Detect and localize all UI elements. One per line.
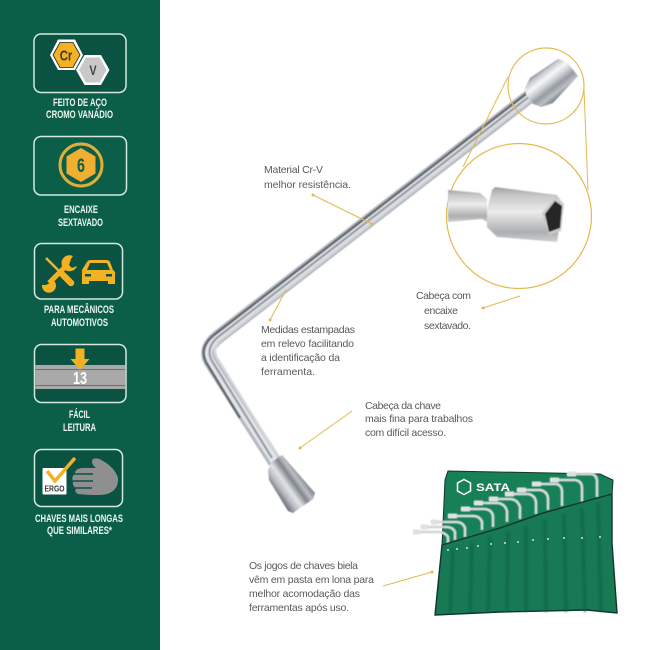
label: fácil leitura <box>63 408 96 434</box>
label: chaves mais longas: QUE SIMILARES* <box>47 525 113 537</box>
text: jogos: ferramentas após uso. <box>249 602 349 614</box>
arrow: cabeça com encaixe <box>482 296 520 310</box>
icon: Cr hexagon: Cr <box>60 47 72 64</box>
arrow: jogos <box>383 570 434 586</box>
icon: wrench and screwdriver <box>42 255 77 293</box>
wrench heads <box>413 474 576 532</box>
panel: chrome vanadium <box>34 34 126 92</box>
text: jogos <box>249 560 374 614</box>
panel: mechanics <box>34 244 122 299</box>
icon: hand <box>72 458 118 495</box>
roll flap <box>442 471 613 546</box>
text: material <box>264 164 351 191</box>
big zoom circle with socket detail <box>446 144 592 288</box>
icon: car <box>82 260 115 284</box>
label: feito de aço: FEITO DE AÇO <box>53 97 107 109</box>
label: para mecânicos: AUTOMOTIVOS <box>51 317 108 329</box>
label: encaixe sextavado: SEXTAVADO <box>58 217 103 229</box>
zoom lines <box>463 77 588 190</box>
wrench set <box>413 474 597 544</box>
shaft and bend <box>204 94 532 462</box>
small zoom circle <box>508 48 584 124</box>
label: para mecânicos: PARA MECÂNICOS <box>44 303 114 316</box>
text: jogos: melhor acomodação das <box>249 588 360 600</box>
label: feito de aço: CROMO VANÁDIO <box>46 108 113 121</box>
upper socket <box>525 59 578 107</box>
text: medidas: em relevo facilitando <box>261 338 354 350</box>
text: cabeça fina: mais fina para trabalhos <box>365 413 473 425</box>
label: chaves mais longas <box>35 513 123 537</box>
logo <box>458 480 510 494</box>
number 13: 13 <box>73 369 87 389</box>
label: fácil leitura: LEITURA <box>63 422 96 434</box>
text: cabeça com encaixe: sextavado. <box>424 320 471 332</box>
icon: V hexagon: V <box>89 63 97 78</box>
arrow: material <box>312 194 374 226</box>
panel: longer wrenches <box>34 450 122 506</box>
icon: hex 6: 6 <box>77 155 85 177</box>
pocket <box>435 494 617 615</box>
text: material: Material Cr-V <box>264 164 323 176</box>
label: feito de aço <box>46 97 113 121</box>
panel: easy reading <box>34 344 126 402</box>
sidebar background <box>0 0 160 650</box>
label: fácil leitura: FÁCIL <box>69 408 90 421</box>
text: medidas: Medidas estampadas <box>261 324 355 336</box>
label: encaixe sextavado: ENCAIXE <box>64 204 98 216</box>
arrow: cabeça fina <box>298 411 352 450</box>
arrow: medidas <box>268 290 286 322</box>
icon: arrow down <box>70 348 90 370</box>
text: jogos: Os jogos de chaves biela <box>249 560 358 572</box>
text: jogos: vêm em pasta em lona para <box>249 574 374 586</box>
text: cabeça fina: com difícil acesso. <box>365 427 446 439</box>
label: encaixe sextavado <box>58 204 103 229</box>
text: medidas: a identificação da <box>261 352 340 364</box>
logo: SATA <box>476 482 510 494</box>
text: cabeça fina <box>365 400 473 439</box>
lower socket <box>268 455 315 513</box>
text: cabeça fina: Cabeça da chave <box>365 400 441 412</box>
pocket size marks <box>447 536 601 551</box>
text: medidas: ferramenta. <box>261 366 315 378</box>
text: cabeça com encaixe: encaixe <box>424 305 458 317</box>
L-shaped wrench <box>204 59 578 513</box>
icon: ergo check: ERGO <box>44 484 65 494</box>
text: material: melhor resistência. <box>264 179 351 191</box>
tool roll <box>413 471 617 615</box>
label: chaves mais longas: CHAVES MAIS LONGAS <box>35 513 123 525</box>
text: cabeça com encaixe: Cabeça com <box>416 290 471 302</box>
text: medidas <box>261 324 355 378</box>
label: para mecânicos <box>44 303 114 329</box>
pocket pleats <box>450 503 601 612</box>
panel: hex socket <box>34 136 126 195</box>
text: cabeça com encaixe <box>416 290 471 332</box>
